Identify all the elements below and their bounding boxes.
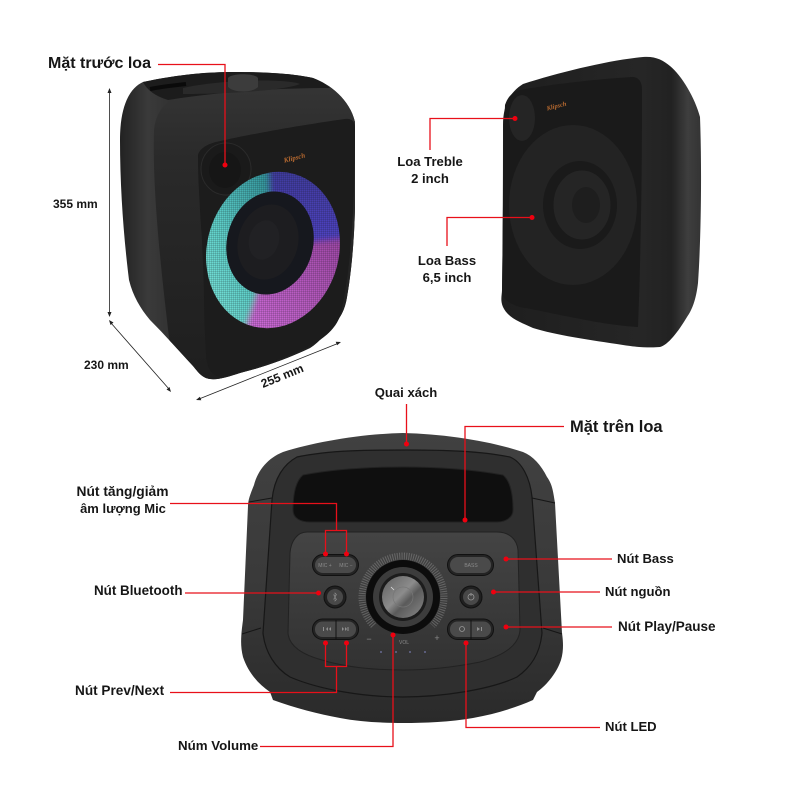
callout line: handle <box>404 404 409 446</box>
front rim <box>154 84 358 385</box>
back treble driver <box>509 95 535 141</box>
front logo: Klipsch <box>282 152 306 165</box>
label: bass: Loa Bass <box>418 253 476 268</box>
label: treble: 2 inch <box>411 171 449 186</box>
volume knob <box>366 560 440 634</box>
handle opening <box>293 467 513 522</box>
label: LED: Nút LED <box>605 719 657 734</box>
mic buttons: MIC − <box>339 563 353 569</box>
top inner band <box>263 450 542 697</box>
bass button <box>448 554 494 576</box>
back grille <box>502 77 642 327</box>
front top face and controls <box>143 72 330 100</box>
dimension arrows <box>108 88 341 400</box>
callout line: power <box>491 590 600 594</box>
callout line: mic <box>170 504 349 556</box>
dimension: depth: 230 mm <box>84 358 129 372</box>
heading: front face: Mặt trước loa <box>48 55 151 72</box>
callout line: bass <box>447 215 534 246</box>
callout line: front <box>158 64 228 168</box>
label: handle: Quai xách <box>375 385 437 400</box>
prev next buttons <box>312 619 358 640</box>
callout line: play pause <box>504 624 612 630</box>
label: bass: 6,5 inch <box>423 270 471 285</box>
front treble driver <box>201 143 251 195</box>
mic buttons: MIC + <box>318 563 332 569</box>
back body <box>501 57 701 347</box>
volume legend: + <box>434 633 440 643</box>
LED ring <box>206 172 340 328</box>
LED and play buttons <box>448 619 494 640</box>
back bass driver <box>509 125 637 285</box>
label: play pause: Nút Play/Pause <box>618 619 716 634</box>
bass button: BASS <box>464 563 478 569</box>
volume legend: − <box>366 634 372 644</box>
label: mic: âm lượng Mic <box>80 501 166 516</box>
label: mic: Nút tăng/giảm <box>77 484 168 499</box>
front speaker <box>120 72 358 385</box>
label: bass button: Nút Bass <box>617 551 674 566</box>
front body <box>120 72 355 379</box>
heading: top face: Mặt trên loa <box>570 418 663 436</box>
label: prev next: Nút Prev/Next <box>75 683 165 698</box>
callout line: bluetooth <box>185 590 321 596</box>
callout line: treble <box>430 116 518 150</box>
callout line: top face <box>462 426 564 522</box>
callout line: volume <box>260 632 396 746</box>
control panel <box>288 532 520 670</box>
label: power: Nút nguồn <box>605 584 670 599</box>
mic buttons <box>312 554 358 576</box>
back speaker <box>501 57 701 347</box>
volume tick ring <box>362 556 444 626</box>
body seams <box>242 498 562 634</box>
volume legend <box>366 633 440 653</box>
back logo: Klipsch <box>545 101 568 113</box>
top body <box>241 433 563 723</box>
dimension: height: 355 mm <box>53 197 98 211</box>
power button <box>460 586 482 608</box>
callout line: prev next <box>170 640 349 692</box>
front grille <box>198 119 355 377</box>
callout line: bass button <box>504 556 612 562</box>
label: volume: Núm Volume <box>178 738 258 753</box>
dimension: width: 255 mm <box>259 361 306 391</box>
callout line: LED <box>464 640 600 728</box>
bluetooth button <box>324 586 346 608</box>
label: treble: Loa Treble <box>397 154 463 169</box>
front bass driver <box>215 182 325 304</box>
volume legend: VOL <box>399 640 409 646</box>
top view speaker <box>241 433 563 723</box>
label: bluetooth: Nút Bluetooth <box>94 583 183 598</box>
